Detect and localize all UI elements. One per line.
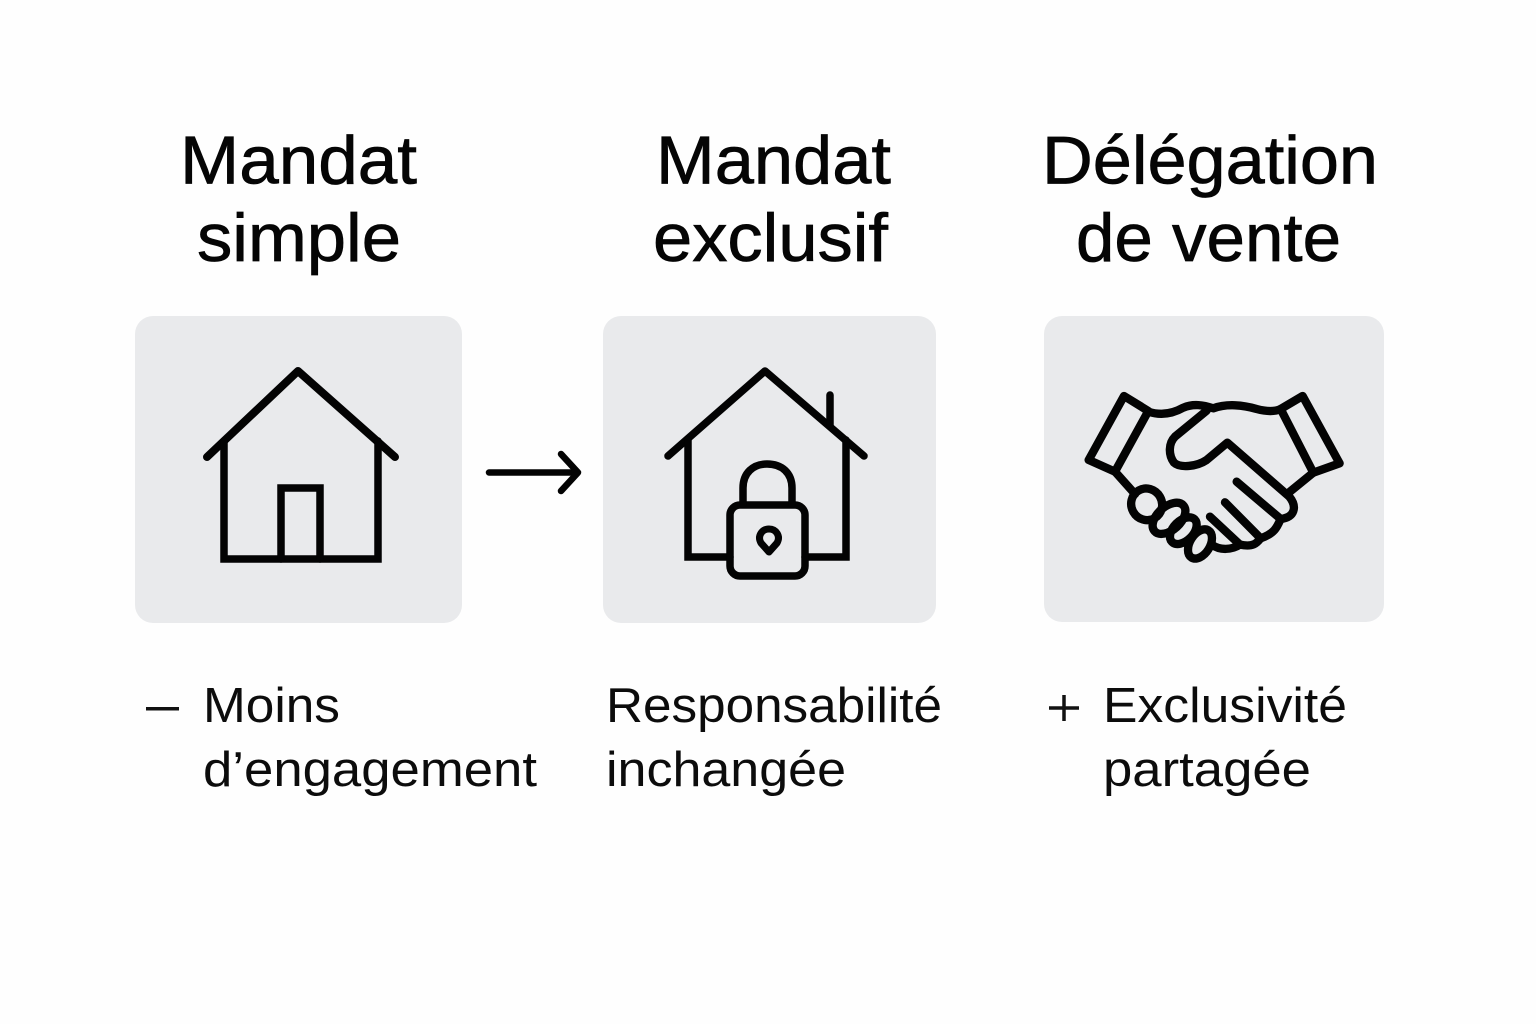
heading: Mandat simple: simple	[197, 200, 401, 276]
heading: Délégation de vente: de vente	[1076, 200, 1341, 276]
text: Exclusivité partagée: Exclusivité	[1103, 679, 1347, 733]
icon: house with padlock	[668, 371, 864, 576]
column: Mandat simple	[135, 122, 537, 797]
text: Responsabilité inchangée: inchangée	[606, 743, 846, 797]
panel: handshake card	[1044, 316, 1384, 622]
icon: house	[207, 371, 395, 559]
column: Délégation de vente	[1042, 122, 1384, 797]
panel: locked house card	[603, 316, 936, 623]
heading: Mandat exclusif: exclusif	[653, 200, 888, 276]
text: Exclusivité partagée: partagée	[1103, 743, 1311, 797]
column: Mandat exclusif	[603, 122, 942, 797]
heading: Mandat simple: Mandat	[180, 122, 417, 198]
heading: Mandat exclusif	[653, 122, 891, 276]
heading: Mandat exclusif: Mandat	[656, 122, 891, 198]
text: Moins d'engagement: d’engagement	[203, 743, 537, 797]
text: Moins d'engagement: Moins	[203, 679, 340, 733]
panel: house card	[135, 316, 462, 623]
arrow	[489, 454, 578, 491]
text: Exclusivité partagée	[1049, 679, 1347, 797]
text: Responsabilité inchangée	[606, 679, 942, 797]
heading: Délégation de vente	[1042, 122, 1378, 276]
heading: Mandat simple	[180, 122, 417, 276]
heading: Délégation de vente: Délégation	[1042, 122, 1378, 198]
text: Moins d'engagement	[146, 679, 537, 797]
text: Responsabilité inchangée: Responsabilité	[606, 679, 942, 733]
icon: handshake	[1089, 396, 1340, 563]
